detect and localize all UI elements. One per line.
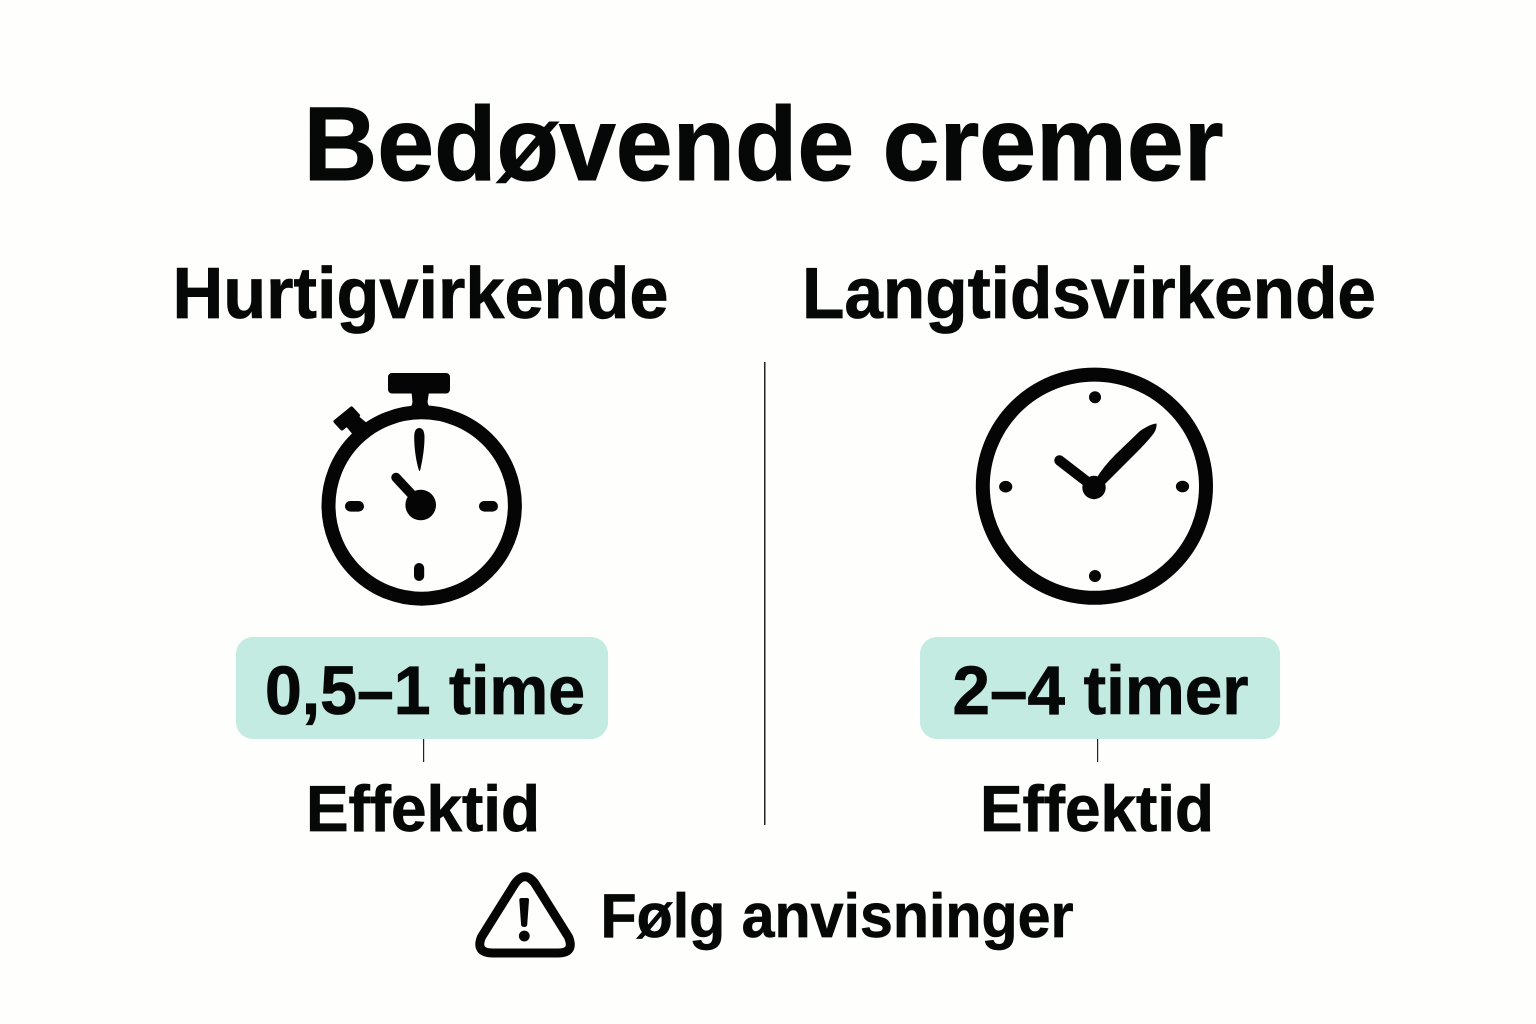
label: long effect time: Effektid <box>980 772 1214 845</box>
heading: long acting: Langtidsvirkende <box>802 254 1376 334</box>
label: fast effect time: Effektid <box>306 772 540 845</box>
connector: long <box>1097 739 1098 762</box>
warning text: Følg anvisninger <box>600 882 1074 951</box>
icon: clock <box>983 375 1206 598</box>
title: Bedøvende cremer <box>304 86 1224 203</box>
heading: fast acting: Hurtigvirkende <box>172 254 668 334</box>
icon: warning triangle <box>480 877 570 953</box>
center divider <box>764 362 766 825</box>
badge: fast duration: 0,5–1 time <box>265 652 585 729</box>
badge: long duration <box>920 637 1280 739</box>
connector: fast <box>423 739 424 762</box>
badge: fast duration <box>236 637 608 739</box>
badge: long duration: 2–4 timer <box>952 652 1248 729</box>
icon: stopwatch <box>328 373 515 599</box>
